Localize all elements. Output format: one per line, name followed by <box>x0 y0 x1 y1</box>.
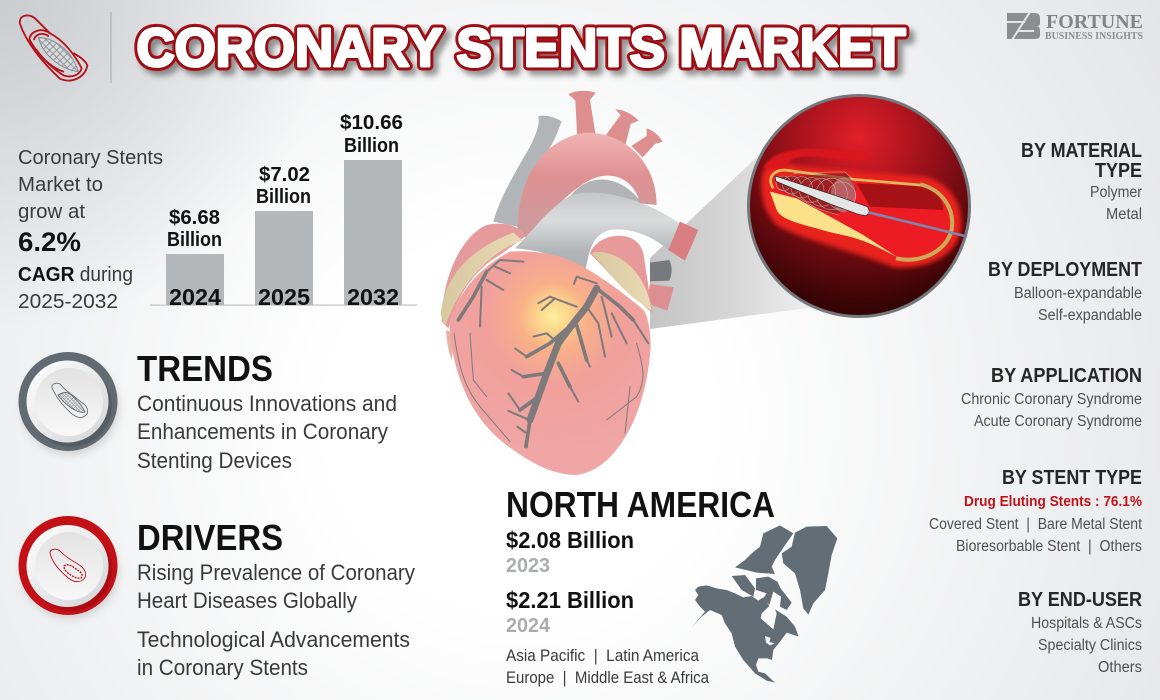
bar 2024: Billion <box>167 229 222 251</box>
vessel wall <box>896 184 952 260</box>
region value 2023 <box>506 527 634 577</box>
mainland <box>692 585 799 683</box>
logo: Fortune Business Insights: FORTUNE <box>1046 11 1143 33</box>
region value 2024 <box>506 587 634 637</box>
region value 2024: 2024 <box>506 615 551 637</box>
artery lumen <box>773 183 948 257</box>
title: CORONARY STENTS MARKET <box>136 18 906 78</box>
text: drivers body: Technological Advancements <box>137 627 410 652</box>
segment: by deployment: BY DEPLOYMENT <box>988 259 1142 281</box>
text: CAGR statement: Coronary Stents <box>18 147 163 169</box>
segment: by application <box>961 365 1142 430</box>
bar 2032 <box>340 112 403 310</box>
other regions: Asia Pacific | Latin America <box>506 647 700 665</box>
logo: Fortune Business Insights: BUSINESS INSIGHTS <box>1045 31 1143 42</box>
segment: by stent type: BY STENT TYPE <box>1002 467 1142 489</box>
segment: by stent type <box>929 467 1143 555</box>
segment: by end-user: Specialty Clinics <box>1038 637 1142 654</box>
bar 2025 <box>255 164 313 310</box>
text: drivers body <box>137 560 415 680</box>
segment: by material type: BY MATERIAL <box>1021 140 1142 162</box>
segment: by deployment: Self-expandable <box>1038 307 1142 324</box>
segment: by application: Chronic Coronary Syndrome <box>961 391 1142 408</box>
right atrium <box>442 224 525 328</box>
left atrial band <box>592 252 652 311</box>
segment: by stent type: Bioresorbable Stent | Others <box>956 538 1142 555</box>
inner arch shadow <box>570 179 643 205</box>
region value 2024: $2.21 Billion <box>506 587 634 613</box>
segment: by end-user: BY END-USER <box>1018 589 1142 611</box>
coronary arteries <box>454 260 648 447</box>
title: CORONARY STENTS MARKET <box>141 23 911 83</box>
other regions: Europe | Middle East & Africa <box>506 669 710 687</box>
bar 2025: $7.02 <box>259 164 310 186</box>
arctic islands <box>732 525 793 610</box>
stent mesh <box>775 173 856 214</box>
text: CAGR statement: 6.2% <box>18 227 81 257</box>
bar 2024 <box>166 207 224 310</box>
bar 2032: Billion <box>344 135 399 157</box>
icon: header stent <box>20 16 87 81</box>
segment: by material type: Polymer <box>1090 184 1142 201</box>
other regions <box>506 647 710 687</box>
heart illustration <box>441 91 698 475</box>
text: drivers body: in Coronary Stents <box>137 655 308 680</box>
segment: by material type: TYPE <box>1095 160 1142 182</box>
segment: by stent type: Covered Stent | Bare Metal Stent <box>929 516 1143 533</box>
pulmonary veins <box>650 260 672 281</box>
magnified lens: stent in artery <box>748 96 970 316</box>
logo: Fortune Business Insights <box>1007 11 1143 42</box>
bar chart <box>150 112 417 310</box>
pulmonary trunk <box>515 193 680 277</box>
segment: by deployment: Balloon-expandable <box>1014 285 1142 302</box>
right atrial band <box>441 233 523 326</box>
text: CAGR statement: grow at <box>18 201 85 223</box>
balloon catheter <box>775 176 869 216</box>
bar 2032: $10.66 <box>340 112 403 134</box>
upper flap <box>763 149 872 169</box>
text: trends body: Continuous Innovations and <box>137 391 397 416</box>
map: north america <box>692 525 837 683</box>
vena cava <box>493 116 562 227</box>
segment: by application: BY APPLICATION <box>991 365 1142 387</box>
region value 2023: $2.08 Billion <box>506 527 634 553</box>
text: trends body <box>137 391 397 473</box>
segment: by end-user: Others <box>1098 659 1142 676</box>
bar 2024: $6.68 <box>169 207 220 229</box>
divider <box>110 12 112 83</box>
segment: by material type: Metal <box>1106 206 1142 223</box>
artery glow <box>761 162 961 268</box>
title: CORONARY STENTS MARKET <box>136 18 906 78</box>
great lakes <box>765 636 775 645</box>
segment: by stent type: Drug Eluting Stents : 76.1% <box>964 493 1142 510</box>
segment: by deployment <box>988 259 1142 324</box>
aortic arch <box>517 133 657 238</box>
aortic branches <box>568 91 663 157</box>
heading: drivers: DRIVERS <box>137 517 283 558</box>
bar 2025: 2025 <box>258 284 310 310</box>
text: trends body: Enhancements in Coronary <box>137 419 388 444</box>
text: drivers body: Rising Prevalence of Coronary <box>137 560 415 585</box>
left atrium <box>590 236 653 313</box>
heading: trends: TRENDS <box>137 348 273 389</box>
ventricles <box>449 251 651 475</box>
text: CAGR statement: 2025-2032 <box>18 291 118 313</box>
text: CAGR statement <box>18 147 163 313</box>
text: CAGR statement: CAGR during <box>18 264 133 286</box>
bar 2032: 2032 <box>347 284 399 310</box>
bar 2025: Billion <box>256 186 311 208</box>
callout cone <box>650 157 830 329</box>
region heading: north america: NORTH AMERICA <box>506 484 775 525</box>
text: drivers body: Heart Diseases Globally <box>137 588 357 613</box>
segment: by application: Acute Coronary Syndrome <box>974 413 1142 430</box>
guide wire <box>868 212 965 236</box>
bar 2024: 2024 <box>169 284 221 310</box>
icon: drivers badge <box>18 516 119 619</box>
icon: trends badge <box>18 352 119 455</box>
segment: by end-user <box>1018 589 1142 676</box>
segment: by end-user: Hospitals & ASCs <box>1031 615 1142 632</box>
title: CORONARY STENTS MARKET <box>136 18 906 78</box>
region value 2023: 2023 <box>506 555 550 577</box>
segment: by material type <box>1021 140 1142 223</box>
greenland <box>782 526 837 615</box>
text: trends body: Stenting Devices <box>137 448 292 473</box>
text: CAGR statement: Market to <box>18 174 103 196</box>
plaque <box>770 192 897 257</box>
